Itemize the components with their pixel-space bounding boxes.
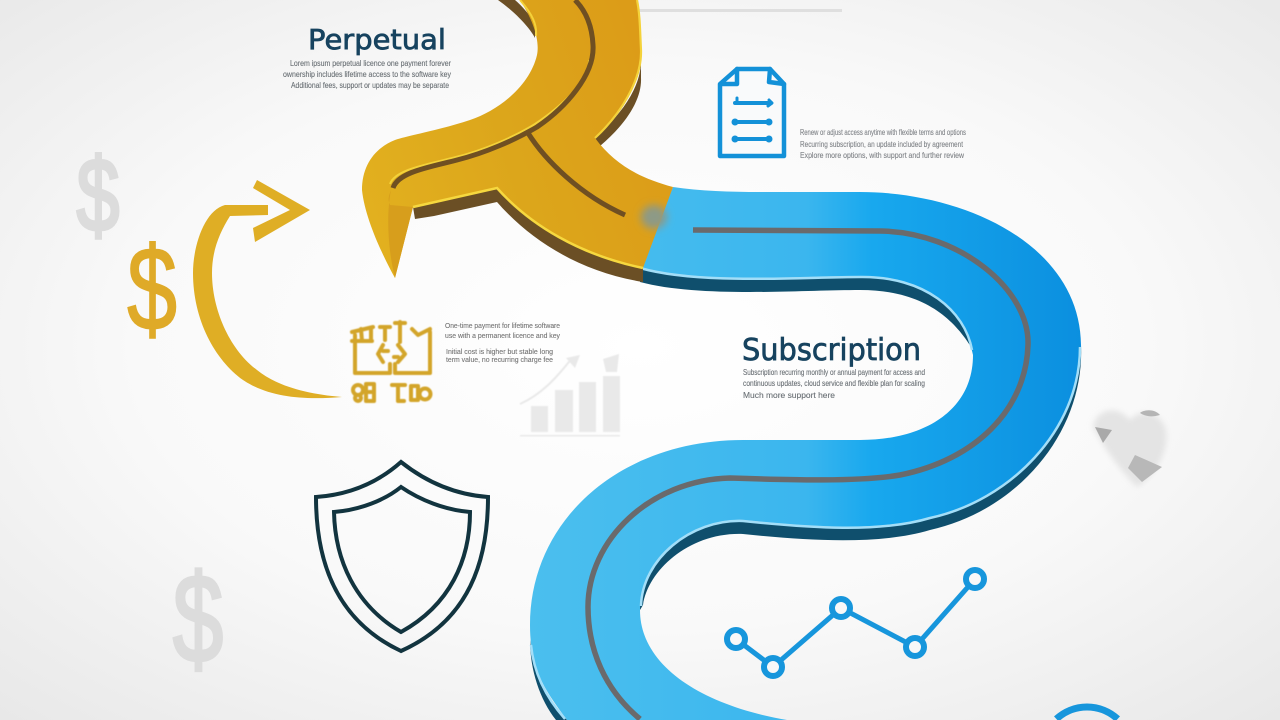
arrow tip shading [388, 190, 413, 278]
subscription description text [743, 368, 925, 400]
gold channel lines [393, 0, 593, 188]
ribbon centre line [588, 230, 1028, 719]
gold icon description text: One-time payment for lifetime software [445, 323, 560, 330]
icon: grey dollar top: $ [77, 138, 119, 254]
gold icon description text: term value, no recurring charge fee [446, 357, 553, 364]
perpetual description text [283, 59, 451, 90]
gold icon description text [445, 323, 560, 364]
document description text: Renew or adjust access anytime with flexible terms and options [800, 128, 966, 137]
partial circle icon [1056, 707, 1118, 719]
icon: document [720, 69, 784, 156]
gold icon description text: Initial cost is higher but stable long [446, 349, 553, 356]
heading: Perpetual: Perpetual [308, 23, 446, 56]
icon: gold dollar: $ [127, 224, 177, 356]
subscription description text: continuous updates, cloud service and flexible plan for scaling [743, 379, 925, 388]
perpetual description text: Additional fees, support or updates may be separate [291, 81, 449, 90]
gold curved arrow [193, 180, 342, 398]
document description text: Explore more options, with support and further review [800, 151, 964, 160]
top grey bar [638, 9, 842, 12]
subscription description text: Subscription recurring monthly or annual payment for access and [743, 368, 925, 377]
subscription description text: Much more support here [743, 391, 836, 400]
heading: Subscription: Subscription [742, 333, 921, 368]
gold edge highlights [413, 188, 643, 268]
perpetual description text: Lorem ipsum perpetual licence one payment forever [290, 59, 451, 68]
ribbon colour blend blob [641, 205, 667, 229]
icon: shield [316, 462, 488, 651]
document description text [800, 128, 966, 160]
ribbon edge highlights [531, 268, 1080, 719]
ghost bar chart [520, 354, 620, 436]
icon: grey dollar bottom: $ [173, 550, 223, 689]
gold perpetual ribbon [362, 0, 673, 282]
line chart [727, 570, 984, 676]
icon: gold puzzle box [352, 322, 430, 401]
gold icon description text: use with a permanent licence and key [445, 333, 560, 340]
icon: grey puzzle piece [1093, 410, 1167, 487]
document description text: Recurring subscription, an update included by agreement [800, 140, 964, 149]
blue subscription ribbon [530, 187, 1081, 720]
perpetual description text: ownership includes lifetime access to the software key [283, 70, 451, 79]
